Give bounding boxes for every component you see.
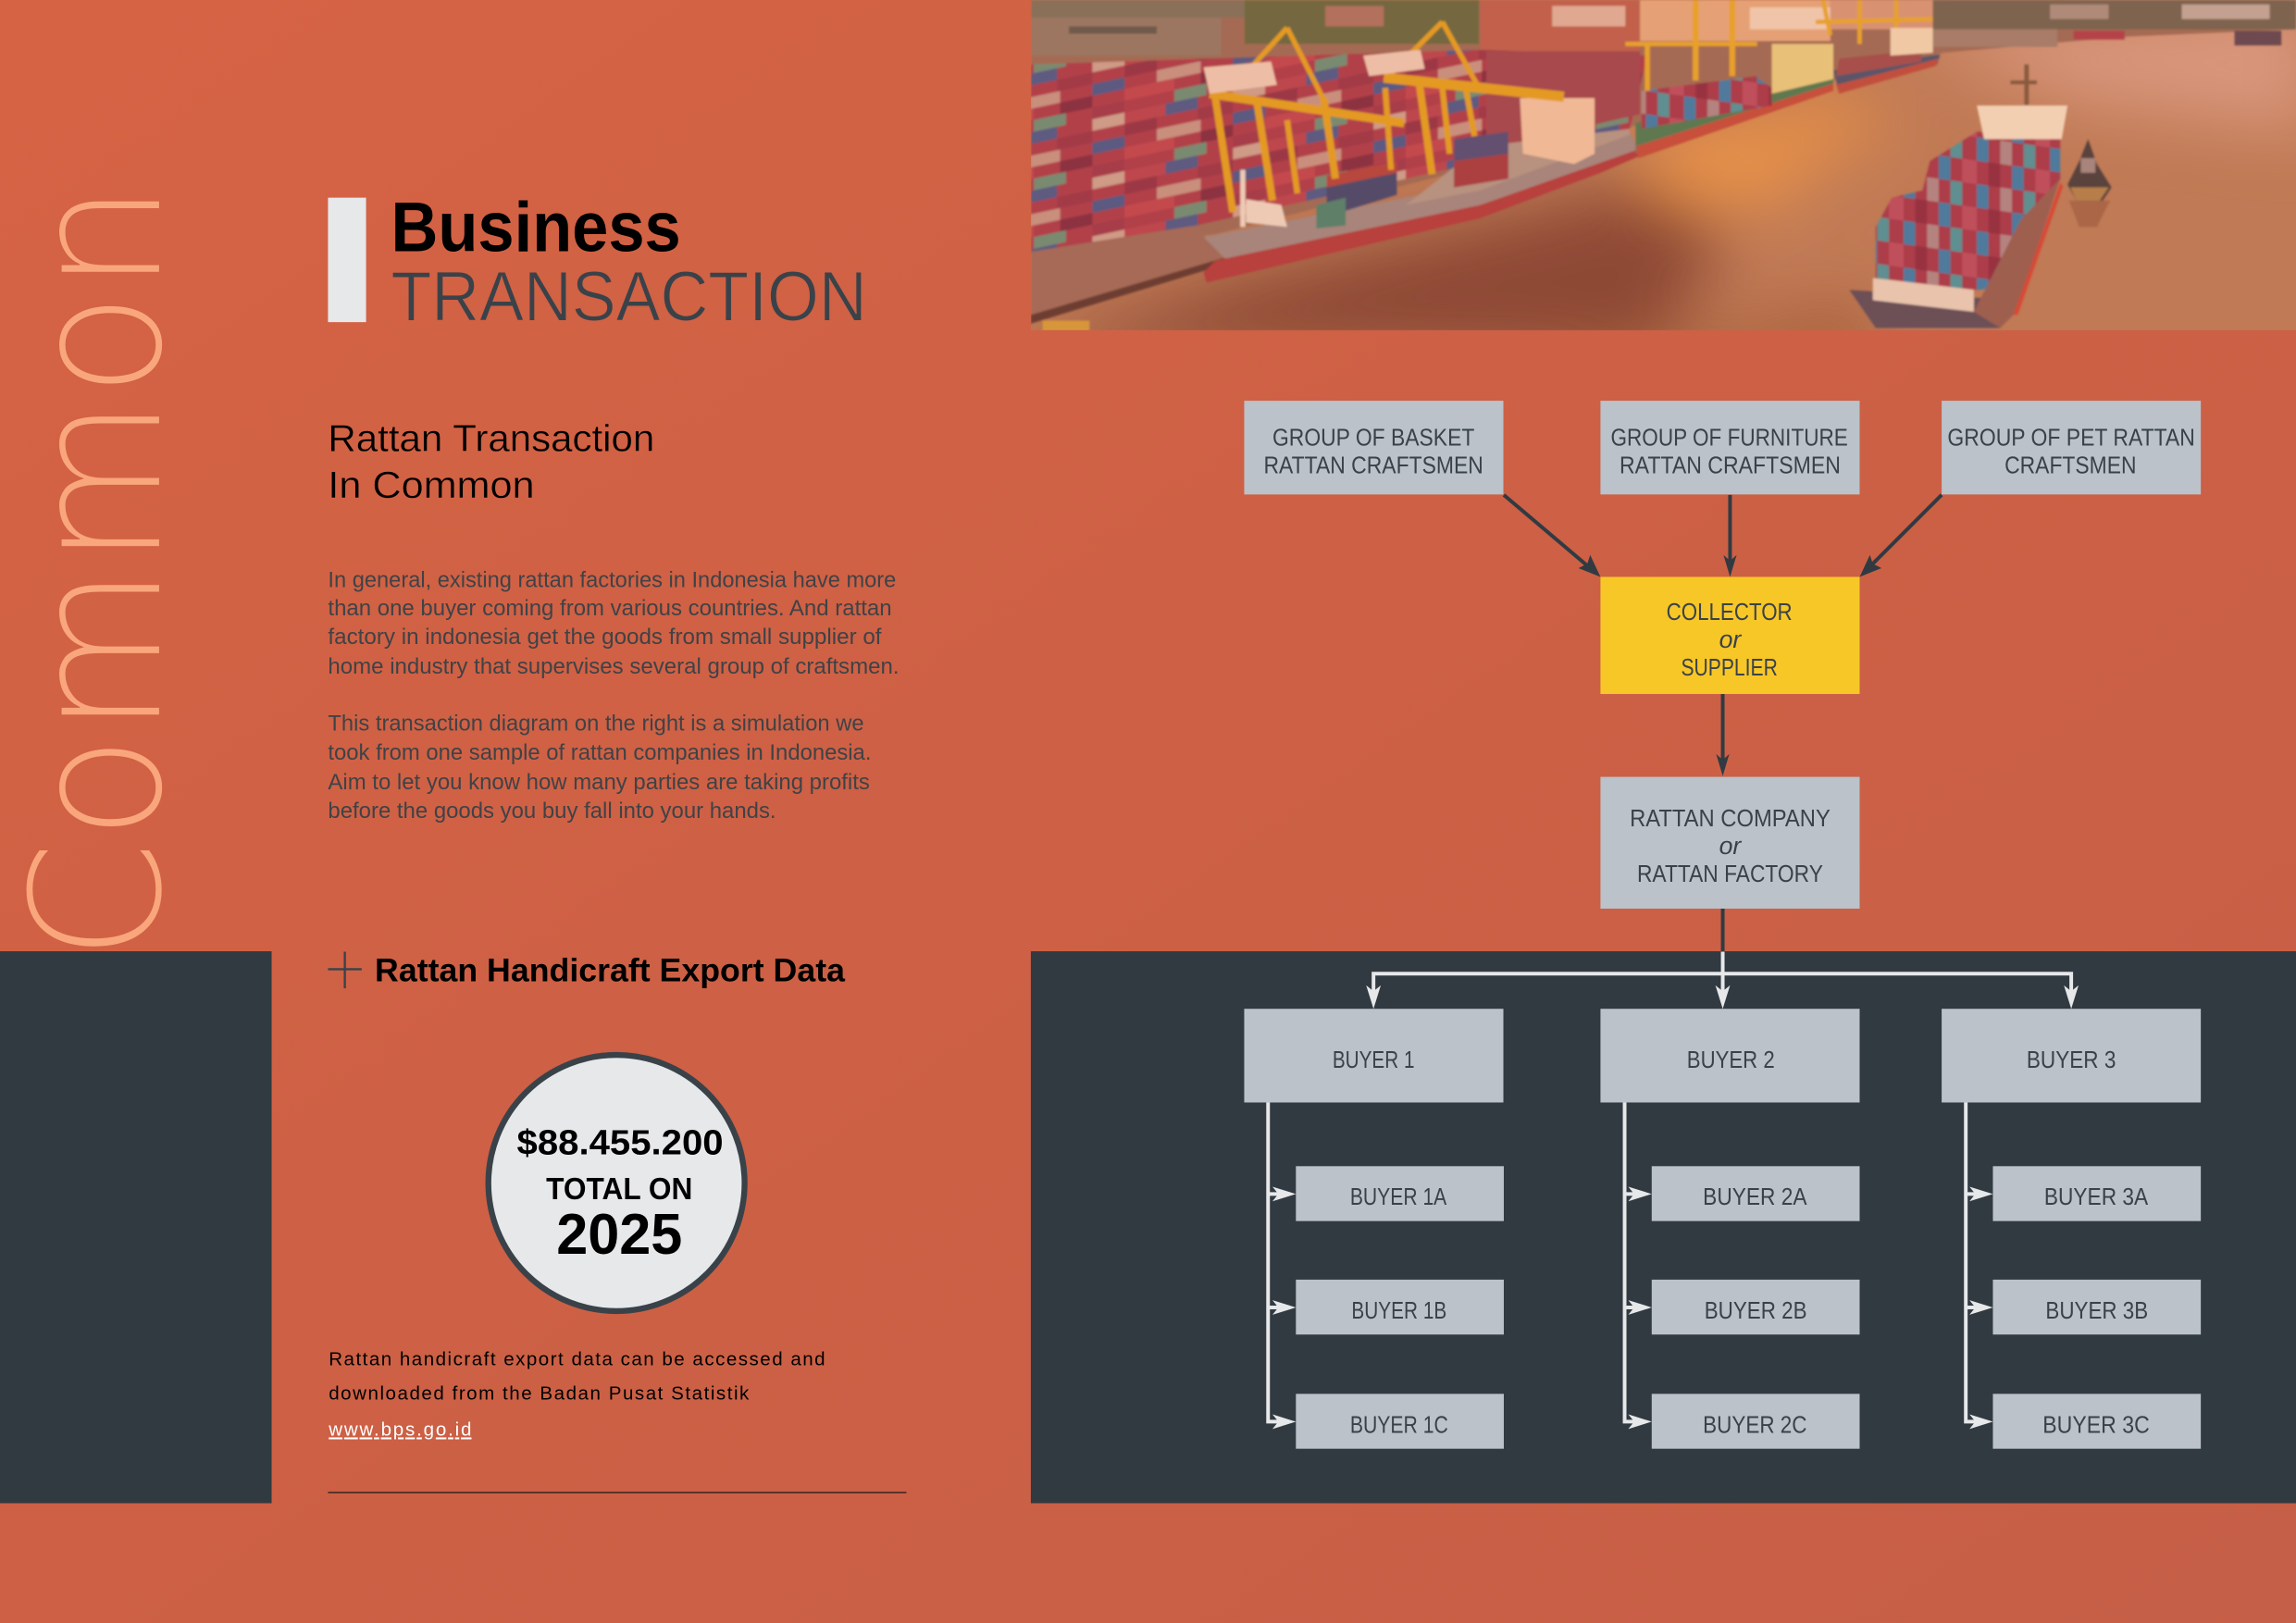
stat label: TOTAL ON — [546, 1172, 692, 1207]
body text: factory in indonesia get the goods from small supplier of — [328, 626, 882, 650]
section heading: Rattan Handicraft Export Data — [375, 953, 846, 989]
box: collector or supplier: COLLECTOR — [1667, 598, 1793, 626]
box: buyer 2A — [1652, 1166, 1859, 1221]
title: TRANSACTION: TRANSACTION — [391, 258, 867, 337]
box: furniture craftsmen — [1600, 401, 1859, 494]
source note: Rattan handicraft export data can be accessed and — [329, 1348, 825, 1369]
footer rule — [328, 1492, 906, 1493]
box: buyer 2 — [1600, 1009, 1859, 1102]
box: rattan company or factory — [1600, 777, 1859, 909]
photo: container port with ships — [1031, 0, 2296, 330]
body text: than one buyer coming from various countries. And rattan — [328, 597, 892, 621]
right dark panel — [1031, 951, 2296, 1504]
icon: plus — [328, 952, 362, 988]
box: buyer 1 — [1244, 1009, 1504, 1102]
arrow: pet group to collector — [1859, 495, 1942, 576]
connector: company to three buyers — [1366, 952, 2079, 1009]
box: buyer 1C — [1296, 1394, 1504, 1449]
box: collector or supplier — [1600, 576, 1859, 694]
box: buyer 1B — [1296, 1280, 1504, 1334]
far ship — [1635, 73, 1833, 154]
body text: Aim to let you know how many parties are taking profits — [328, 771, 870, 795]
stat year: 2025 — [556, 1203, 682, 1267]
body text: home industry that supervises several group of craftsmen. — [328, 655, 900, 679]
body text: took from one sample of rattan companies in Indonesia. — [328, 741, 871, 765]
arrow: basket group to collector — [1504, 495, 1600, 576]
title accent bar — [328, 198, 366, 322]
box: collector or supplier: SUPPLIER — [1681, 653, 1778, 681]
connector: company to dark panel — [1721, 909, 1724, 952]
box: pet rattan craftsmen: GROUP OF PET RATTAN — [1947, 424, 2195, 452]
box: buyer 3 — [1942, 1009, 2201, 1102]
box: buyer 2: BUYER 2 — [1687, 1046, 1775, 1073]
box: basket craftsmen: GROUP OF BASKET — [1272, 424, 1474, 452]
left dark panel — [0, 951, 272, 1504]
title: Business: Business — [391, 188, 681, 266]
box: buyer 1A — [1296, 1166, 1504, 1221]
big ship — [1849, 290, 2017, 328]
box: buyer 2B — [1652, 1280, 1859, 1334]
source note: downloaded from the Badan Pusat Statistik — [329, 1383, 750, 1405]
body text: In general, existing rattan factories in Indonesia have more — [328, 569, 896, 593]
body text — [328, 569, 900, 824]
subtitle: Rattan Transaction — [328, 416, 654, 459]
ship hull — [1204, 131, 1639, 261]
connector: buyer 3 to sub-buyers — [1966, 1102, 1992, 1429]
box: rattan company or factory: RATTAN COMPANY — [1630, 804, 1831, 832]
box: buyer 2C — [1652, 1394, 1859, 1449]
subtitle — [328, 416, 654, 506]
box: pet rattan craftsmen: CRAFTSMEN — [2004, 452, 2137, 479]
box: buyer 3A: BUYER 3A — [2044, 1183, 2149, 1210]
box: pet rattan craftsmen — [1942, 401, 2201, 494]
box: buyer 2C: BUYER 2C — [1703, 1410, 1807, 1438]
box: collector or supplier: or — [1719, 626, 1743, 653]
box: buyer 1A: BUYER 1A — [1350, 1183, 1447, 1210]
tug boat — [2067, 139, 2112, 201]
source note — [328, 1348, 825, 1440]
connector: buyer 1 to sub-buyers — [1268, 1102, 1296, 1429]
body text: before the goods you buy fall into your hands. — [328, 799, 776, 824]
box: buyer 2A: BUYER 2A — [1703, 1183, 1807, 1210]
box: rattan company or factory: or — [1719, 832, 1743, 860]
box: buyer 1B: BUYER 1B — [1351, 1296, 1446, 1324]
box: buyer 3B — [1992, 1280, 2201, 1334]
box: buyer 3A — [1992, 1166, 2201, 1221]
box: buyer 3C: BUYER 3C — [2042, 1410, 2150, 1438]
box: rattan company or factory: RATTAN FACTORY — [1637, 860, 1823, 887]
arrow: collector to company — [1716, 694, 1730, 776]
arrow: furniture group to collector — [1723, 495, 1737, 576]
box: basket craftsmen: RATTAN CRAFTSMEN — [1263, 452, 1483, 479]
cranes — [1210, 22, 1564, 212]
subtitle: In Common — [328, 464, 535, 506]
box: furniture craftsmen: GROUP OF FURNITURE — [1610, 424, 1848, 452]
box: buyer 3: BUYER 3 — [2027, 1046, 2116, 1073]
body text: This transaction diagram on the right is a simulation we — [328, 712, 864, 737]
source link: www.bps.go.id — [328, 1419, 471, 1440]
box: buyer 1C: BUYER 1C — [1350, 1410, 1448, 1438]
box: buyer 1: BUYER 1 — [1333, 1046, 1414, 1073]
box: buyer 2B: BUYER 2B — [1705, 1296, 1807, 1324]
box: basket craftsmen — [1244, 401, 1504, 494]
box: buyer 3B: BUYER 3B — [2045, 1296, 2148, 1324]
stat value: $88.455.200 — [517, 1124, 724, 1163]
box: furniture craftsmen: RATTAN CRAFTSMEN — [1620, 452, 1841, 479]
box: buyer 3C — [1992, 1394, 2201, 1449]
title block — [328, 188, 867, 337]
stat circle — [489, 1055, 745, 1311]
connector: buyer 2 to sub-buyers — [1625, 1102, 1652, 1429]
